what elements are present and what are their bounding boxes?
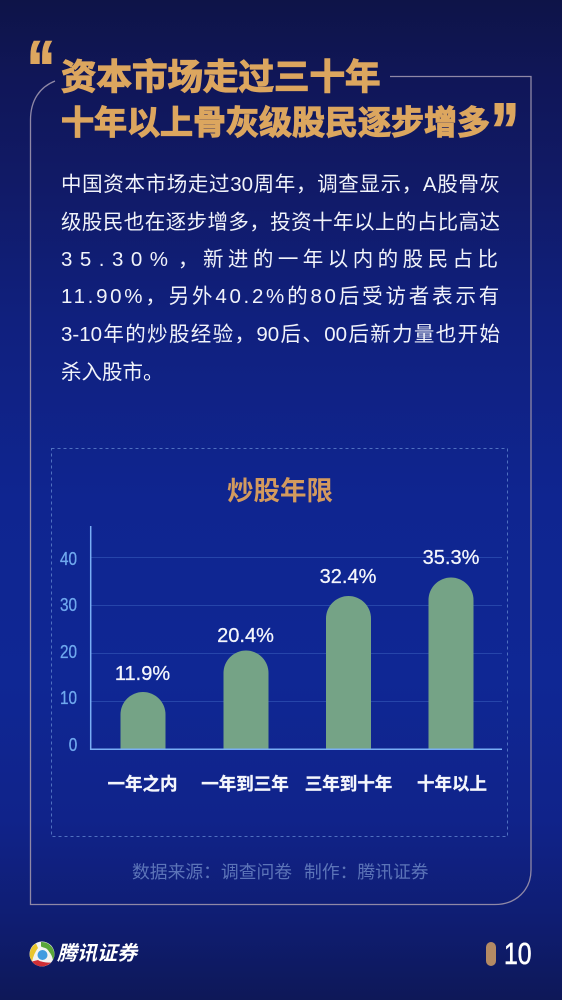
y axis labels: 20 (60, 642, 77, 662)
value labels: 11.9% (115, 663, 170, 685)
category labels: 一年到三年 (201, 774, 289, 794)
bars (120, 578, 474, 750)
category labels: 十年以上 (417, 774, 487, 794)
gridlines (91, 558, 502, 702)
title (61, 57, 490, 141)
closing quotation mark: ” (491, 87, 519, 172)
body text: 中国资本市场走过30周年，调查显示，A股骨灰 (61, 173, 500, 196)
brand name: 腾讯证券 (57, 943, 137, 965)
axes (91, 526, 502, 749)
body text: 11.90%，另外40.2%的80后受访者表示有 (61, 285, 502, 308)
category labels (108, 774, 487, 794)
bar: 十年以上 (428, 578, 474, 750)
page marker (486, 942, 496, 966)
y axis labels: 30 (60, 595, 77, 615)
opening quotation mark: “ (27, 25, 55, 110)
icon: tencent logo (30, 942, 54, 966)
body text: 3-10年的炒股经验，90后、00后新力量也开始 (61, 323, 500, 346)
source note: 数据来源：调查问卷 制作：腾讯证券 (132, 862, 429, 882)
category labels: 一年之内 (108, 774, 178, 794)
y axis labels (60, 549, 77, 755)
bar: 三年到十年 (326, 596, 371, 750)
body text: 35.30%，新进的一年以内的股民占比 (61, 248, 500, 271)
y axis labels: 0 (69, 735, 77, 755)
bar: 一年之内 (120, 692, 166, 750)
y axis labels: 40 (60, 549, 77, 569)
bar: 一年到三年 (224, 650, 268, 750)
value labels (115, 547, 480, 685)
body text: 级股民也在逐步增多，投资十年以上的占比高达 (61, 211, 500, 234)
title line 1: 资本市场走过三十年 (61, 57, 381, 97)
page number: 10 (504, 936, 532, 971)
body text: 杀入股市。 (61, 361, 164, 384)
panel: chart (51, 448, 508, 837)
chart title: 炒股年限 (227, 476, 333, 506)
body text (61, 173, 502, 384)
category labels: 三年到十年 (305, 774, 392, 794)
value labels: 32.4% (320, 566, 377, 588)
value labels: 35.3% (423, 547, 480, 569)
y axis labels: 10 (60, 688, 77, 708)
title line 2: 十年以上骨灰级股民逐步增多 (61, 104, 490, 141)
value labels: 20.4% (217, 625, 274, 647)
